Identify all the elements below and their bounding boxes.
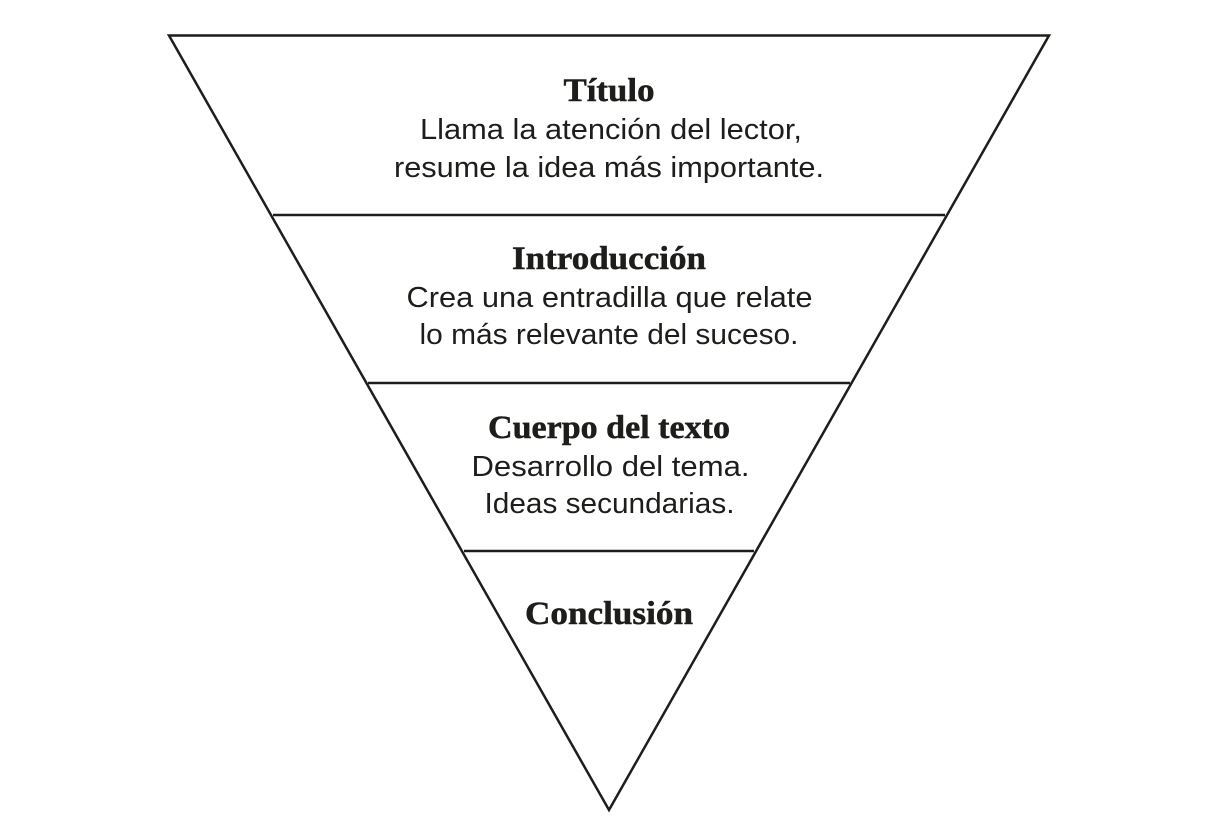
heading: cuerpo del texto: Cuerpo del texto	[488, 410, 730, 446]
heading: título: Título	[564, 73, 654, 109]
heading: conclusión: Conclusión	[525, 596, 693, 632]
section: introducción	[406, 241, 812, 351]
text: introducción description	[406, 282, 812, 351]
text: cuerpo del texto description	[472, 451, 750, 520]
text: título description	[394, 114, 824, 184]
section: título	[394, 73, 824, 184]
heading: introducción: Introducción	[512, 241, 706, 277]
text: cuerpo del texto description: Ideas secundarias.	[484, 488, 734, 520]
section: cuerpo del texto	[472, 410, 750, 520]
text: título description: Llama la atención del lector,	[420, 114, 802, 146]
text: introducción description: lo más relevante del suceso.	[420, 319, 798, 351]
text: cuerpo del texto description: Desarrollo del tema.	[472, 451, 750, 483]
inverted triangle outline	[169, 36, 1049, 810]
text: introducción description: Crea una entradilla que relate	[406, 282, 812, 314]
text: título description: resume la idea más importante.	[394, 152, 824, 184]
